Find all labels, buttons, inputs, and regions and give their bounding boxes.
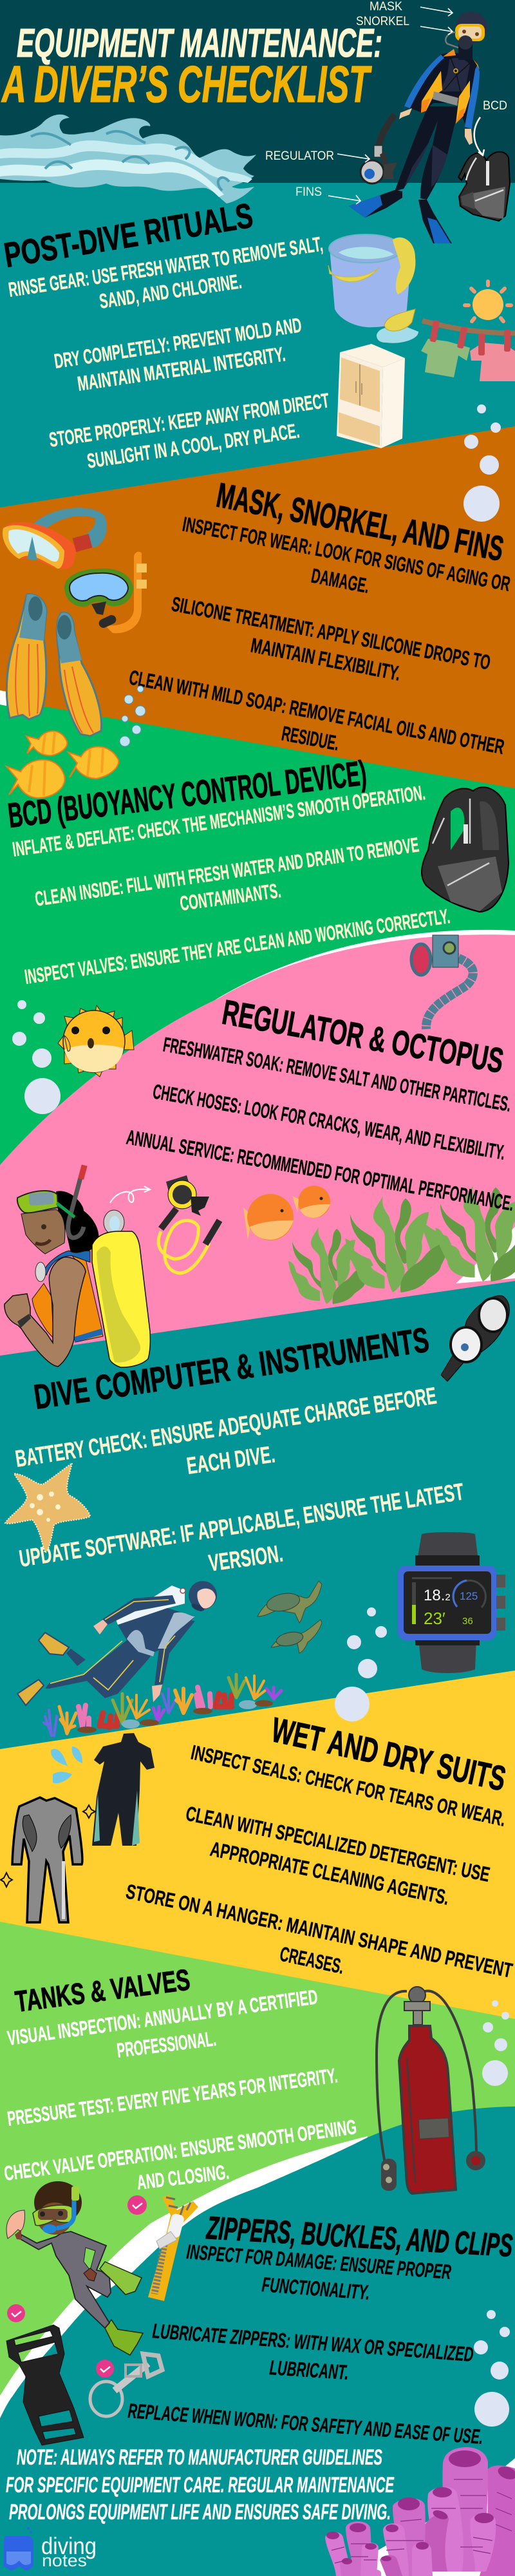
note [6, 2445, 395, 2524]
icon: dive computer watch: 36 [462, 1616, 473, 1627]
panel: tanks and valves text: AND CLOSING. [136, 2160, 230, 2194]
bubbles: column by wardrobe [464, 404, 501, 522]
panel: dive computer and instruments text: VERSION. [207, 1540, 285, 1577]
arm and back [5, 1257, 86, 1367]
gauge [104, 1210, 124, 1235]
labels: MASK [370, 0, 402, 14]
arrows [328, 7, 484, 204]
icon: pufferfish [58, 1005, 134, 1077]
labels: FINS [295, 185, 322, 199]
icon: yellow fish trio [6, 731, 118, 798]
panel: post-dive rituals text: DRY COMPLETELY: PREVENT MOLD AND [53, 313, 303, 373]
panel: mask, snorkel and fins text [127, 476, 512, 759]
icon: sparkles [1, 1805, 95, 1887]
illustration: woman diver with yellow tank [5, 1164, 150, 1367]
labels: BCD [483, 99, 507, 113]
icon: wardrobe [337, 344, 405, 448]
panel: tanks and valves text: PROFESSIONAL. [115, 2027, 218, 2062]
icon: full wetsuit [12, 1797, 82, 1922]
panel: post-dive rituals text: STORE PROPERLY: KEEP AWAY FROM DIRECT [48, 388, 331, 451]
icon: blue-grey regulator and hose [411, 935, 473, 1029]
illustration: swimming diver [17, 1581, 217, 1705]
icon: sun [465, 281, 511, 321]
panel: tanks and valves text: VISUAL INSPECTION: ANNUALLY BY A CERTIFIED [6, 1985, 319, 2050]
panel: mask, snorkel and fins text: DAMAGE. [310, 564, 371, 598]
icon: dive computer watch: 23′ [424, 1609, 445, 1628]
hair [56, 1191, 98, 1254]
mask [17, 1191, 58, 1213]
face [21, 1209, 65, 1254]
bubbles: green panel [12, 1000, 61, 1114]
icon: pair of fins [6, 594, 102, 736]
diver figure [349, 12, 487, 243]
gear: header BCD [458, 152, 510, 221]
icon: dive computer watch [398, 1532, 505, 1673]
panel: tanks and valves text [3, 1962, 358, 2194]
panel: dive computer and instruments text [14, 1320, 466, 1577]
panel: zippers, buckles and clips text: FUNCTIONALITY. [261, 2273, 371, 2304]
panel: wet and dry suits text [124, 1710, 514, 1982]
panel: BCD text [6, 753, 451, 989]
labels [265, 0, 507, 199]
icon: sea turtles [258, 1581, 322, 1653]
icon: water drops [51, 1747, 82, 1783]
icon: bucket and sponge [328, 234, 418, 343]
labels: SNORKEL [356, 15, 409, 28]
tank [92, 1231, 150, 1367]
icon: silver clip [90, 2354, 162, 2416]
orange vest and strap [32, 1256, 103, 1342]
icon: yellow regulator [158, 1175, 220, 1273]
panel: zippers, buckles and clips text: LUBRICANT. [269, 2356, 350, 2384]
illustration: coral reef [44, 1674, 281, 1736]
illustration: seaweed [288, 1185, 515, 1304]
icon: dive computer watch: 18.2 [424, 1587, 451, 1604]
panel: regulator and octopus text [125, 993, 515, 1215]
icon: dive computer watch: 125 [460, 1590, 478, 1602]
icon: small bubbles [120, 686, 145, 746]
bubbles: by watch [335, 1607, 387, 1721]
bubbles: by zippers panel [474, 2310, 510, 2427]
labels: REGULATOR [265, 149, 334, 163]
panel: post-dive rituals text: POST-DIVE RITUALS [1, 196, 256, 275]
icon: starfish [5, 1463, 90, 1553]
illustration: purple coral [325, 2447, 515, 2576]
panel: mask, snorkel and fins text: MAINTAIN FLEXIBILITY. [249, 634, 402, 685]
panel: post-dive rituals text [1, 196, 331, 473]
icon: short dry suit [92, 1733, 154, 1846]
icon: check badges [7, 2195, 147, 2378]
icon: black buckle [6, 2325, 84, 2445]
arrow: curly white [110, 1186, 150, 1203]
icon: orange dive mask [3, 507, 107, 569]
panel: post-dive rituals text: SAND, AND CHLORINE. [98, 269, 243, 313]
illustration: boy diver with shell [6, 2181, 143, 2355]
icon: BCD vest [422, 787, 509, 912]
gear: header regulator [360, 115, 397, 184]
illustration: diver with labelled gear [265, 0, 510, 243]
panel: zippers, buckles and clips text [127, 2210, 514, 2448]
panel: dive computer and instruments text: EACH DIVE. [185, 1441, 277, 1479]
icon: gauge console [441, 1296, 509, 1381]
panel: mask, snorkel and fins text: RESIDUE. [280, 721, 341, 755]
icon: green mask and orange snorkel [64, 552, 147, 633]
panel: tanks and valves text: TANKS & VALVES [14, 1962, 192, 2018]
logo: diving notes: diving [41, 2533, 97, 2559]
panel: post-dive rituals text: SUNLIGHT IN A COOL, DRY PLACE. [86, 419, 301, 473]
logo: diving notes [4, 2527, 97, 2571]
illustration: ocean waves [0, 115, 256, 204]
panel: post-dive rituals text: MAINTAIN MATERIAL INTEGRITY. [76, 342, 287, 395]
icon: zipper [148, 2195, 198, 2301]
logo: diving notes: notes [42, 2551, 87, 2570]
panel: BCD text: CONTAMINANTS. [178, 878, 283, 915]
title [1, 21, 382, 113]
icon: red scuba tank [377, 1987, 485, 2193]
bubbles: by tank [482, 2000, 509, 2086]
snorkel [68, 1166, 84, 1238]
icon: clothesline with shirts [421, 319, 515, 381]
icon: orange puffer fish pair [243, 1186, 330, 1240]
panel: wet and dry suits text: CREASES. [278, 1942, 346, 1978]
